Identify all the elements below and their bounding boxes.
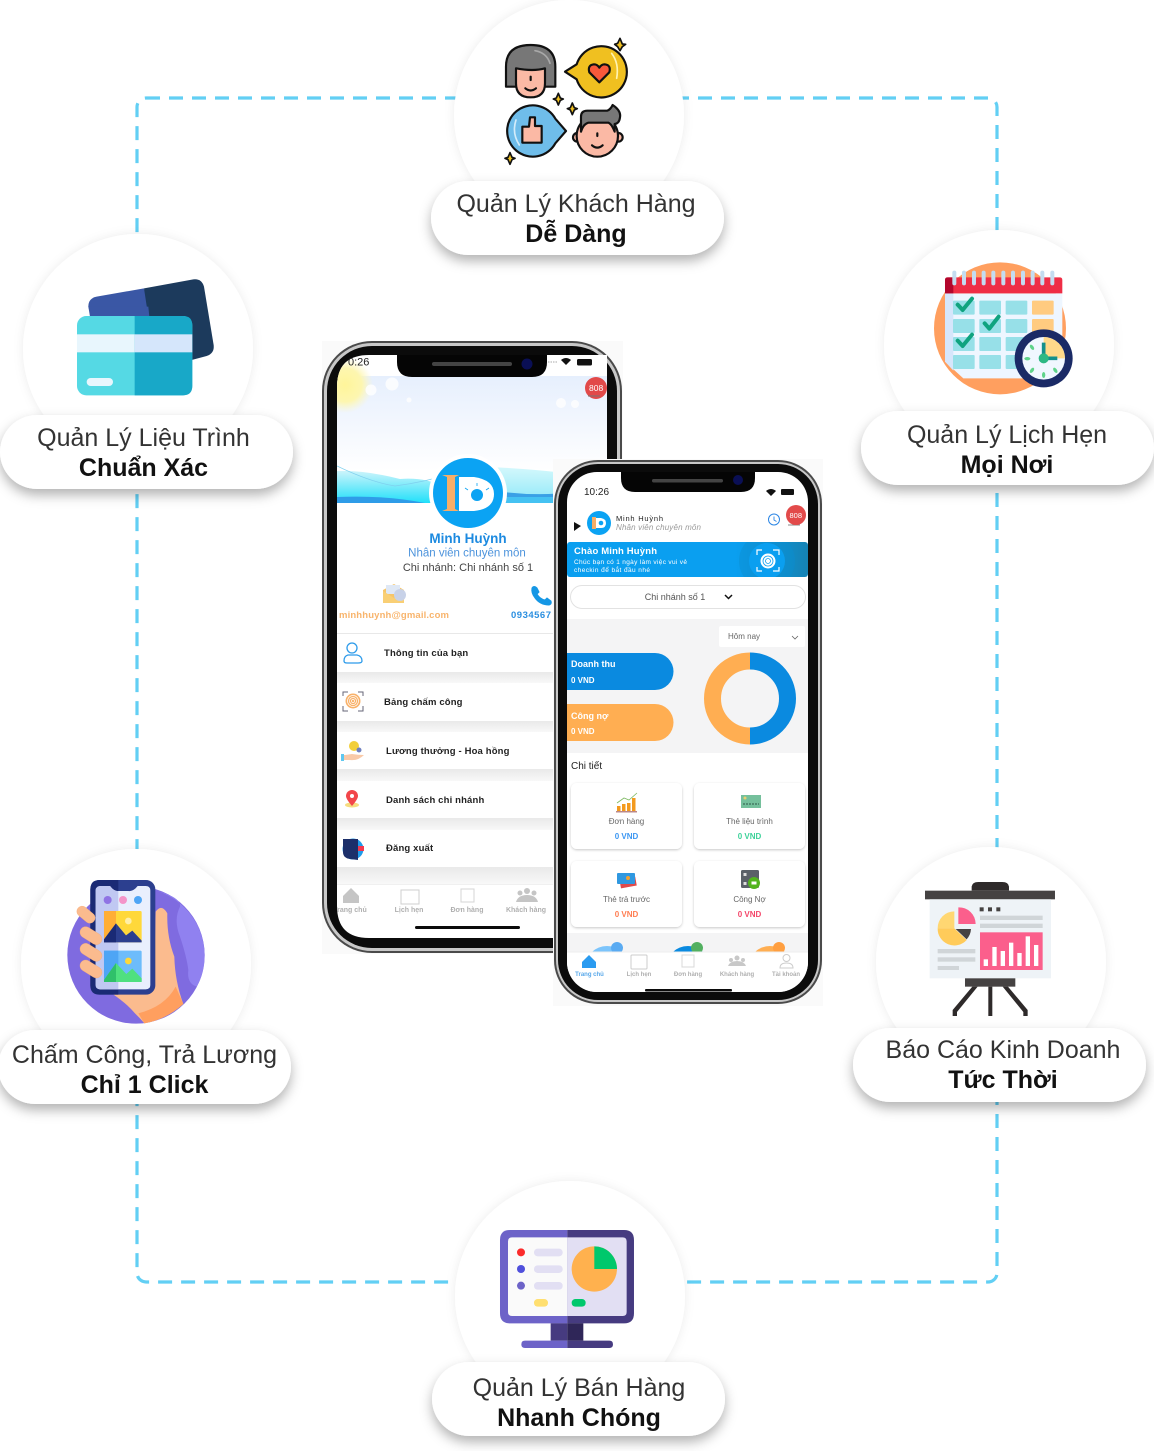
bottom tab bar: Trang chủ — [575, 972, 604, 978]
circle: treatment course management — [23, 234, 253, 464]
status bar: 0:26 — [348, 356, 369, 368]
card: prepaid cards: Thẻ trả trước — [603, 895, 650, 904]
notch — [397, 355, 547, 377]
pill: sales report caption — [853, 1028, 1146, 1102]
email address: minhhuynh@gmail.com — [339, 610, 449, 621]
badge: notification: 808 — [589, 383, 603, 393]
bottom tab bar: Tài khoản — [772, 972, 800, 978]
pill: sales management caption: Nhanh Chóng — [497, 1404, 661, 1432]
pill: customer management caption: Dễ Dàng — [525, 218, 627, 248]
icon: calendar and clock — [934, 262, 1073, 394]
icon: monitor — [500, 1230, 634, 1348]
logo avatar — [429, 458, 507, 528]
phone number: 0934567 — [511, 610, 551, 621]
menu: profile — [344, 643, 468, 663]
icon: envelope — [383, 584, 406, 603]
wave banner — [337, 466, 553, 503]
icon: phone — [532, 586, 551, 605]
pill: attendance caption: Chấm Công, Trả Lương — [12, 1041, 277, 1069]
header: user: Nhân viên chuyên môn — [616, 523, 702, 532]
pill: revenue — [560, 653, 674, 690]
icon: hand holding phone — [67, 880, 205, 1024]
card: debt — [694, 861, 805, 927]
bottom tab bar: Khách hàng — [506, 907, 546, 914]
pill: customer management caption: Quản Lý Khách Hàng — [456, 190, 696, 218]
menu: timesheet: Bảng chấm công — [384, 697, 463, 708]
pill: sales report caption: Tức Thời — [948, 1066, 1058, 1094]
pill: customer management caption — [431, 181, 724, 255]
menu: branches: Danh sách chi nhánh — [386, 795, 484, 806]
pill: attendance caption — [0, 1030, 291, 1104]
period dropdown — [719, 626, 805, 647]
menu list — [337, 633, 553, 885]
profile name and role — [403, 533, 533, 571]
card: orders — [571, 783, 682, 849]
status bar: 10:26 — [584, 487, 609, 498]
phone: dashboard screen — [553, 459, 823, 1006]
banner: greeting and check-in: Chúc bạn có 1 ngày làm việc vui vẻ — [574, 559, 687, 566]
pill: appointment caption — [861, 411, 1154, 485]
status bar — [584, 487, 794, 498]
icon: customers with speech bubbles — [505, 38, 627, 164]
profile name and role: Minh Huỳnh — [429, 531, 507, 546]
menu: salary — [341, 741, 510, 761]
card: prepaid cards: 0 VND — [615, 910, 639, 919]
quick stats strip — [567, 933, 808, 952]
pill: debt: Công nợ — [571, 711, 609, 721]
menu: profile: Thông tin của bạn — [384, 648, 468, 659]
revenue panel — [560, 619, 808, 753]
card: debt: 0 VND — [738, 910, 762, 919]
branch selector — [570, 586, 806, 608]
bottom tab bar: Lịch hẹn — [395, 907, 423, 914]
bottom tab bar — [333, 888, 546, 929]
pill: treatment course caption: Chuẩn Xác — [79, 454, 208, 482]
bottom tab bar: Khách hàng — [720, 972, 754, 978]
circle: sales management — [455, 1181, 685, 1411]
period dropdown: Hôm nay — [728, 632, 760, 641]
circle: appointment management — [884, 230, 1114, 460]
card: treatment cards: 0 VND — [738, 832, 762, 841]
pill: revenue: 0 VND — [571, 676, 595, 685]
pill: sales management caption: Quản Lý Bán Hàng — [473, 1374, 685, 1402]
pill: appointment caption: Quản Lý Lịch Hẹn — [907, 421, 1107, 449]
pill: revenue: Doanh thu — [571, 659, 616, 669]
pill: appointment caption: Mọi Nơi — [961, 451, 1053, 479]
badge: notification — [585, 377, 607, 399]
pill: debt: 0 VND — [571, 727, 595, 736]
bottom tab bar: Đơn hàng — [451, 907, 483, 914]
circle: attendance and payroll — [21, 849, 251, 1079]
circle: sales report — [876, 847, 1106, 1077]
circle: customer management — [454, 0, 684, 230]
card: prepaid cards — [571, 861, 682, 927]
bottom tab bar: Đơn hàng — [674, 972, 702, 978]
menu: logout: Đăng xuất — [386, 843, 434, 854]
bottom tab bar: Trang chủ — [333, 907, 367, 914]
card: debt: Công Nợ — [733, 895, 766, 904]
card: orders: 0 VND — [615, 832, 639, 841]
card: orders: Đơn hàng — [609, 817, 644, 826]
branch selector: Chi nhánh số 1 — [645, 592, 705, 602]
pill: debt — [560, 704, 674, 741]
bottom tab bar: Lịch hẹn — [627, 972, 652, 978]
donut chart — [712, 661, 788, 736]
menu: logout — [342, 838, 434, 860]
pill: sales report caption: Báo Cáo Kinh Doanh — [886, 1036, 1120, 1064]
profile name and role: Nhân viên chuyên môn — [408, 548, 526, 560]
icon: presentation board — [925, 882, 1055, 1016]
dashed connector frame — [137, 98, 997, 1282]
card: treatment cards: Thẻ liệu trình — [726, 817, 773, 826]
menu: timesheet — [343, 692, 463, 711]
icon: cards — [77, 279, 214, 395]
header: user: 808 — [790, 511, 802, 520]
menu: salary: Lương thưởng - Hoa hồng — [386, 746, 510, 757]
bottom tab bar — [567, 952, 808, 992]
menu: branches — [345, 790, 484, 808]
phone: employee profile screen — [317, 341, 623, 954]
pill: attendance caption: Chỉ 1 Click — [81, 1071, 209, 1099]
profile name and role: Chi nhánh: Chi nhánh số 1 — [403, 562, 533, 574]
status bar — [348, 356, 592, 368]
banner: greeting and check-in: checkin để bắt đầu nhé — [574, 565, 650, 574]
pill: treatment course caption: Quản Lý Liệu Trình — [37, 424, 250, 452]
banner: greeting and check-in — [567, 542, 808, 577]
pill: sales management caption — [432, 1362, 725, 1436]
header: user — [574, 505, 806, 535]
section heading: Chi tiết — [571, 760, 602, 772]
pill: treatment course caption — [0, 415, 293, 489]
notch — [621, 472, 755, 492]
header: user: Minh Huỳnh — [616, 514, 663, 523]
banner: greeting and check-in: Chào Minh Huỳnh — [574, 546, 657, 557]
card: treatment cards — [694, 783, 805, 849]
